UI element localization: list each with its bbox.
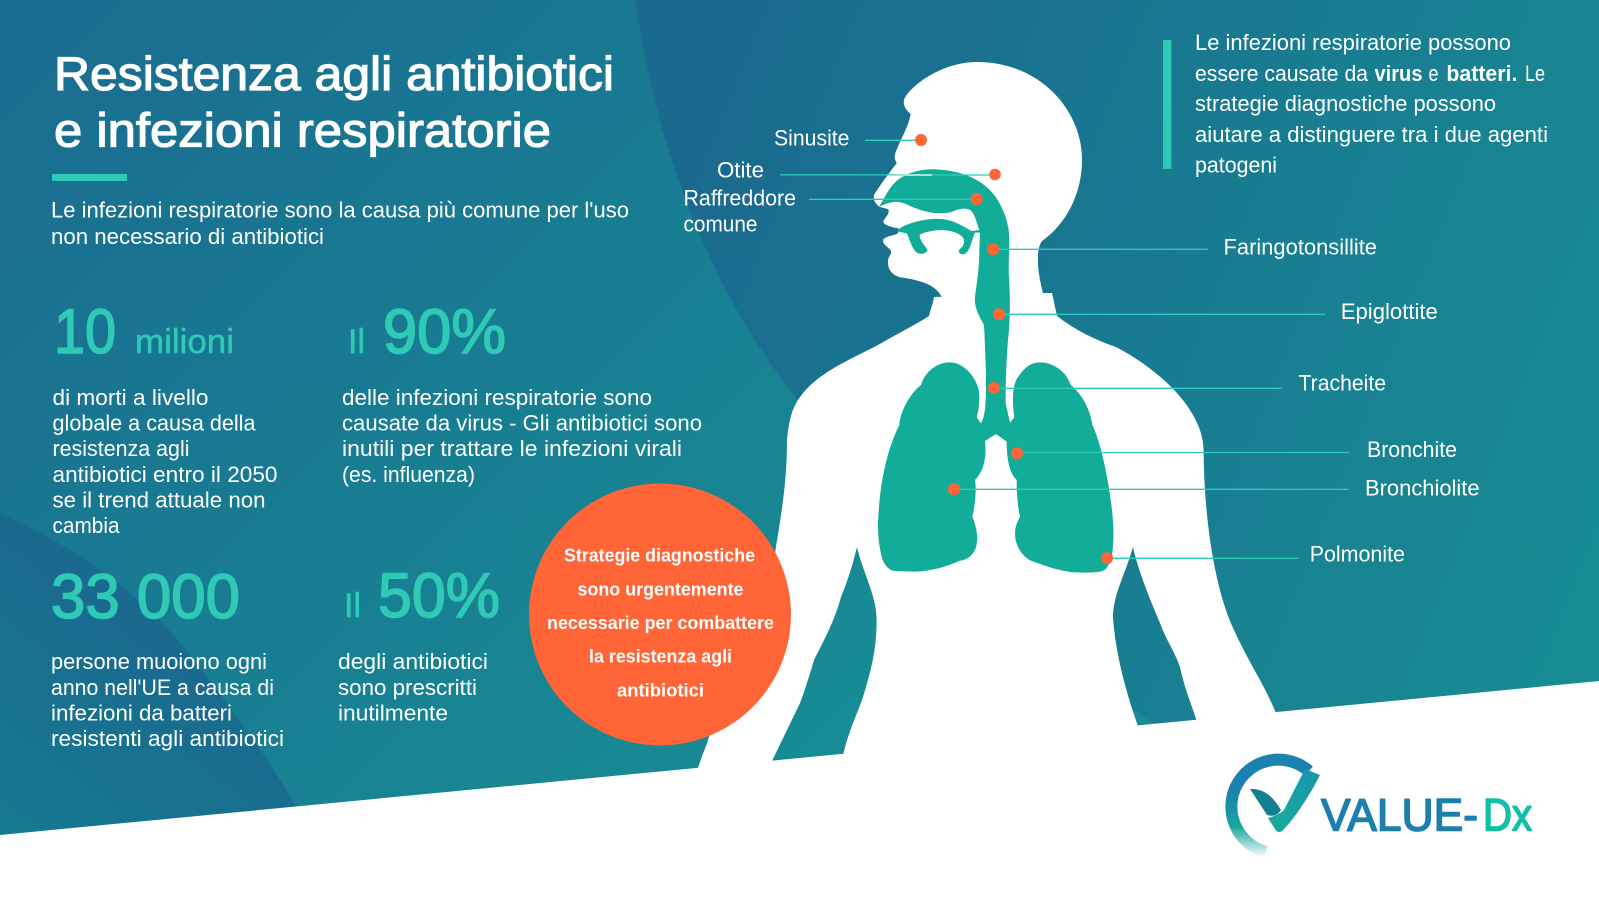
label: Bronchiolite: Bronchiolite xyxy=(1365,476,1480,501)
label: Otite: Otite xyxy=(717,158,764,183)
side note text: aiutare a distinguere tra i due agenti xyxy=(1195,122,1548,147)
intro text: non necessario di antibiotici xyxy=(51,224,324,249)
title underline xyxy=(52,174,127,181)
label: Raffreddore comune: Raffreddore xyxy=(684,186,796,211)
stat: il 50%: inutilmente xyxy=(338,700,448,726)
label: Bronchite xyxy=(1011,437,1457,462)
label: Raffreddore comune: comune xyxy=(684,212,758,237)
stat: il 90%: 90% xyxy=(383,297,506,367)
stat: 33 000: infezioni da batteri xyxy=(51,700,232,726)
stat: il 90%: Il xyxy=(348,323,365,361)
title xyxy=(54,47,614,157)
callout: orange circle: antibiotici xyxy=(617,680,704,701)
label: Polmonite xyxy=(1101,542,1405,567)
stat: il 90%: causate da virus - Gli antibiotici sono xyxy=(342,410,702,436)
stat: il 90%: (es. influenza) xyxy=(342,462,475,487)
title: Resistenza agli antibiotici xyxy=(54,47,614,100)
stat: 33 000 xyxy=(51,562,284,751)
stat: 33 000: 33 000 xyxy=(51,562,240,632)
stat: 10 milioni: antibiotici entro il 2050 xyxy=(52,462,278,487)
white bottom band xyxy=(0,681,1599,900)
logo: VALUE-Dx: Dx xyxy=(1483,790,1532,841)
stat: 33 000: resistenti agli antibiotici xyxy=(51,726,284,751)
label: Faringotonsillite xyxy=(987,234,1377,259)
label: Epiglottite xyxy=(993,299,1438,324)
side note text: patogeni xyxy=(1195,153,1277,178)
side note accent bar xyxy=(1163,40,1171,169)
logo: VALUE-Dx: VALUE- xyxy=(1321,790,1478,841)
label: Bronchiolite xyxy=(948,476,1480,501)
side note text: strategie diagnostiche possono xyxy=(1195,91,1496,116)
side note text: batteri. xyxy=(1446,61,1517,86)
label: Polmonite: Polmonite xyxy=(1310,542,1405,567)
callout: orange circle: Strategie diagnostiche xyxy=(564,545,755,566)
logo: VALUE-Dx xyxy=(1231,760,1532,852)
stat: 33 000: anno nell'UE a causa di xyxy=(51,675,274,700)
stat: 10 milioni: se il trend attuale non xyxy=(52,488,266,512)
background swoosh: lower left xyxy=(0,513,298,840)
stat: il 50%: 50% xyxy=(378,561,500,631)
stat: il 90%: delle infezioni respiratorie sono xyxy=(342,385,652,410)
label: Sinusite xyxy=(774,126,927,151)
stat: 10 milioni: milioni xyxy=(135,323,234,361)
stat: il 90%: inutili per trattare le infezioni virali xyxy=(342,436,682,461)
side note text: e xyxy=(1428,61,1438,86)
stat: il 50%: sono prescritti xyxy=(338,675,477,700)
intro text xyxy=(51,198,629,249)
human silhouette xyxy=(698,62,1276,800)
stat: 10 milioni: di morti a livello xyxy=(52,385,208,410)
label: Epiglottite: Epiglottite xyxy=(1341,299,1438,324)
stat: il 50%: degli antibiotici xyxy=(338,649,488,674)
label: Tracheite: Tracheite xyxy=(1298,371,1386,396)
stat: 33 000: persone muoiono ogni xyxy=(51,649,267,674)
stat: 10 milioni xyxy=(52,297,278,538)
airway and lungs xyxy=(878,169,1113,573)
callout: orange circle: la resistenza agli xyxy=(589,646,732,667)
callout: orange circle: sono urgentemente xyxy=(578,579,744,600)
label: Raffreddore comune xyxy=(684,186,983,237)
stat: 10 milioni: cambia xyxy=(52,513,120,538)
side note text: Le infezioni respiratorie possono xyxy=(1195,30,1511,55)
callout: orange circle: necessarie per combattere xyxy=(547,612,774,633)
stat: 10 milioni: resistenza agli xyxy=(52,436,190,461)
intro text: Le infezioni respiratorie sono la causa più comune per l'uso xyxy=(51,198,629,222)
label: Otite xyxy=(717,158,1001,183)
stat: il 90% xyxy=(342,297,702,487)
label: Tracheite xyxy=(988,371,1386,396)
label: Sinusite: Sinusite xyxy=(774,126,850,151)
stat: il 50% xyxy=(338,561,500,726)
side note text: Le xyxy=(1525,61,1545,86)
label: Bronchite: Bronchite xyxy=(1367,437,1457,462)
callout: orange circle xyxy=(529,484,791,746)
stat: 10 milioni: 10 xyxy=(54,297,116,367)
label: Faringotonsillite: Faringotonsillite xyxy=(1224,234,1377,259)
side note text xyxy=(1195,30,1548,178)
title: e infezioni respiratorie xyxy=(54,104,551,157)
side note text: essere causate da xyxy=(1195,61,1369,86)
background swoosh: upper right xyxy=(635,0,1599,724)
side note text: virus xyxy=(1374,61,1422,86)
stat: il 50%: Il xyxy=(344,587,361,625)
stat: 10 milioni: globale a causa della xyxy=(52,410,256,436)
